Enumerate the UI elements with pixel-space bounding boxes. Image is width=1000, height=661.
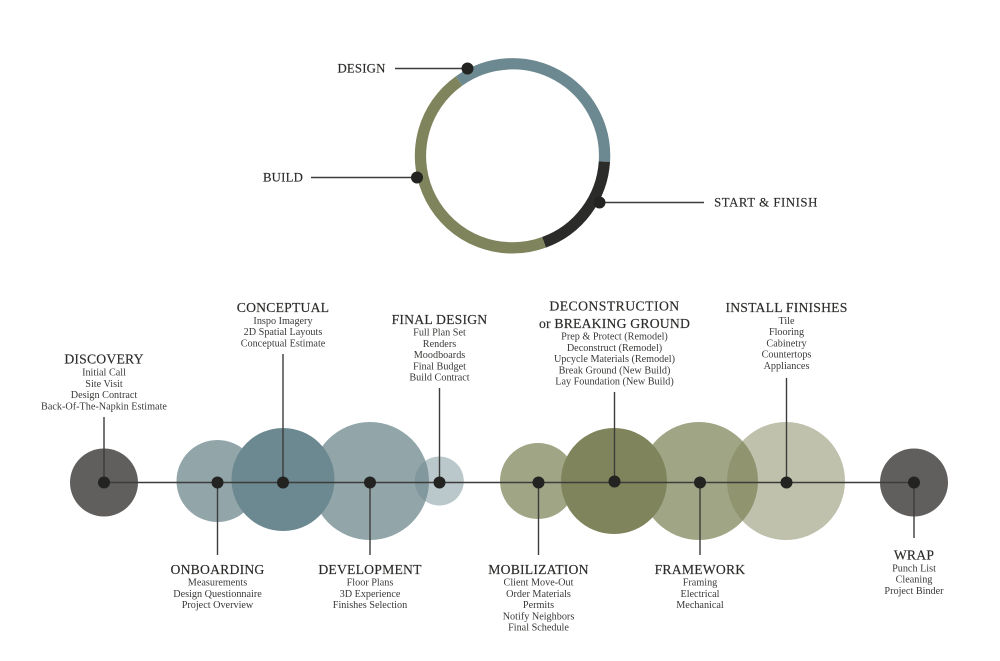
step: final design: Final Budget [413, 361, 466, 372]
step: install finishes: INSTALL FINISHES [725, 300, 848, 315]
step: install finishes [725, 300, 848, 488]
circle: conceptual [232, 428, 334, 531]
step: onboarding: ONBOARDING [170, 562, 265, 577]
step: conceptual: Conceptual Estimate [241, 338, 326, 349]
step: mobilization: Final Schedule [508, 623, 569, 634]
step: conceptual: Inspo Imagery [253, 316, 313, 327]
step: discovery [41, 352, 167, 488]
circle: wrap [880, 448, 948, 516]
step: wrap: WRAP [894, 548, 934, 562]
callout: build: BUILD [263, 170, 303, 184]
timeline circles [70, 422, 948, 540]
step: discovery: Back-Of-The-Napkin Estimate [41, 401, 167, 412]
step: final design: Build Contract [409, 373, 470, 384]
step: final design: Moodboards [414, 350, 465, 361]
circle: deconstruction [561, 428, 667, 534]
step: deconstruction or breaking ground: Break Ground (New Build) [559, 365, 670, 376]
step: discovery: Initial Call [82, 368, 126, 378]
step: deconstruction or breaking ground: or BREAKING GROUND [539, 316, 690, 331]
step: deconstruction or breaking ground: Deconstruct (Remodel) [567, 343, 662, 354]
step: final design: Renders [423, 339, 456, 350]
circle: framework [640, 422, 758, 540]
step: framework: Framing [683, 578, 717, 588]
ring segment: start and finish [544, 162, 604, 242]
step: development: Floor Plans [347, 578, 393, 588]
ring diagram [263, 62, 818, 248]
callout: build [263, 170, 423, 184]
step: final design: Full Plan Set [413, 328, 466, 338]
callout: design [337, 62, 474, 76]
step: development: DEVELOPMENT [318, 562, 422, 577]
step: install finishes: Cabinetry [766, 338, 807, 349]
step: final design: FINAL DESIGN [392, 312, 487, 327]
step: conceptual: CONCEPTUAL [237, 300, 329, 315]
step: mobilization: Order Materials [506, 589, 571, 600]
step: discovery: DISCOVERY [64, 352, 144, 366]
step: install finishes: Tile [778, 316, 795, 327]
step: discovery: Design Contract [71, 390, 137, 401]
step: mobilization: Notify Neighbors [503, 611, 574, 622]
step: framework: Electrical [680, 589, 720, 600]
step: development: 3D Experience [340, 589, 401, 600]
step: onboarding: Project Overview [182, 600, 254, 611]
step: wrap [884, 476, 944, 597]
step: wrap: Cleaning [896, 575, 932, 586]
step: discovery: Site Visit [85, 379, 123, 390]
step: framework [655, 476, 745, 611]
step: development [318, 476, 422, 611]
step: install finishes: Countertops [762, 350, 811, 361]
step: mobilization: Client Move-Out [504, 578, 574, 588]
circle: development [311, 422, 429, 540]
step: framework: FRAMEWORK [655, 562, 745, 577]
callout: start and finish [594, 196, 818, 210]
circle: install finishes [727, 422, 845, 540]
step: deconstruction or breaking ground: Lay Foundation (New Build) [555, 377, 674, 388]
callout: design: DESIGN [337, 62, 386, 76]
step: mobilization: Permits [523, 600, 554, 611]
circle: mobilization [500, 443, 576, 519]
step: deconstruction or breaking ground: DECONSTRUCTION [549, 298, 680, 314]
step: install finishes: Appliances [764, 361, 809, 372]
step: mobilization: MOBILIZATION [488, 562, 589, 577]
step: conceptual: 2D Spatial Layouts [244, 327, 322, 338]
step: deconstruction or breaking ground: Prep & Protect (Remodel) [561, 332, 668, 342]
circle: onboarding [176, 440, 258, 522]
circle: discovery [70, 448, 138, 516]
callout: start and finish: START & FINISH [714, 196, 818, 210]
circle: final design [415, 456, 464, 506]
step: wrap: Project Binder [884, 586, 944, 597]
step: onboarding: Measurements [188, 578, 247, 588]
step: deconstruction or breaking ground [539, 298, 690, 488]
step: final design [392, 312, 487, 488]
step: mobilization [488, 476, 589, 634]
timeline line [104, 482, 914, 484]
step: framework: Mechanical [676, 600, 724, 611]
step: onboarding: Design Questionnaire [173, 589, 262, 600]
ring segment: build [420, 81, 544, 248]
step: deconstruction or breaking ground: Upcycle Materials (Remodel) [554, 354, 675, 365]
step: wrap: Punch List [892, 563, 936, 574]
step: development: Finishes Selection [333, 600, 407, 611]
step: install finishes: Flooring [769, 327, 804, 338]
step: onboarding [170, 476, 265, 611]
ring segment: design [459, 64, 605, 162]
step: conceptual [237, 300, 329, 488]
